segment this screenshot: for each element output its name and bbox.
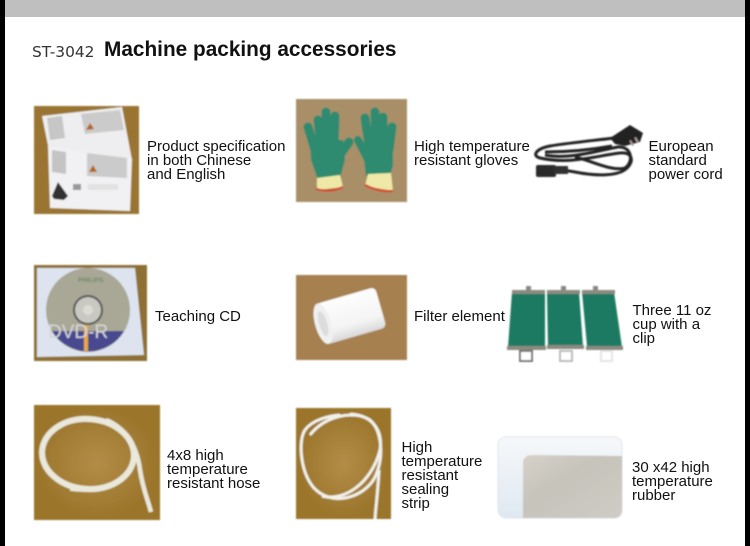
label: hose: temperature xyxy=(167,461,248,478)
label: product specification: Product specification xyxy=(147,138,285,155)
label: sealing strip: resistant xyxy=(402,467,459,484)
photo: hose xyxy=(34,405,160,520)
title: ST-3042 xyxy=(32,43,94,61)
label: hose: 4x8 high xyxy=(167,447,224,464)
photo: teaching CD: PHILIPS xyxy=(78,277,104,284)
label: product specification: in both Chinese xyxy=(147,152,251,169)
label: power cord: standard xyxy=(648,152,707,169)
photo: filter element xyxy=(296,275,407,360)
label: sealing strip: sealing xyxy=(402,481,449,498)
photo: cup clips xyxy=(507,286,623,361)
label: gloves: High temperature xyxy=(414,138,530,155)
label: hose: resistant hose xyxy=(167,475,260,492)
photo: gloves xyxy=(296,99,407,202)
top grey band xyxy=(5,0,745,17)
label: rubber: 30 x42 high xyxy=(632,459,710,476)
photo: sealing strip xyxy=(296,408,391,519)
label: teaching CD: Teaching CD xyxy=(155,308,241,325)
label: cup clips: cup with a xyxy=(632,316,701,333)
label: sealing strip: High xyxy=(402,439,432,456)
label: sealing strip: temperature xyxy=(402,453,482,470)
label: gloves: resistant gloves xyxy=(414,152,518,169)
photo: teaching CD: DVD-R xyxy=(48,322,108,343)
photo: product specification sheets xyxy=(34,106,139,214)
label: rubber: temperature xyxy=(632,473,713,490)
label: sealing strip: strip xyxy=(402,495,430,512)
photo: teaching CD xyxy=(34,265,147,361)
label: power cord: power cord xyxy=(648,166,723,183)
photo: power cord xyxy=(536,125,643,177)
label: product specification: and English xyxy=(147,166,225,183)
label: cup clips: Three 11 oz xyxy=(632,302,711,319)
label: filter element: Filter element xyxy=(414,308,506,325)
photo: rubber sheet xyxy=(498,437,622,518)
label: cup clips: clip xyxy=(632,330,655,347)
label: rubber: rubber xyxy=(632,487,675,504)
title: Machine packing accessories xyxy=(104,38,396,61)
label: power cord: European xyxy=(648,138,714,155)
